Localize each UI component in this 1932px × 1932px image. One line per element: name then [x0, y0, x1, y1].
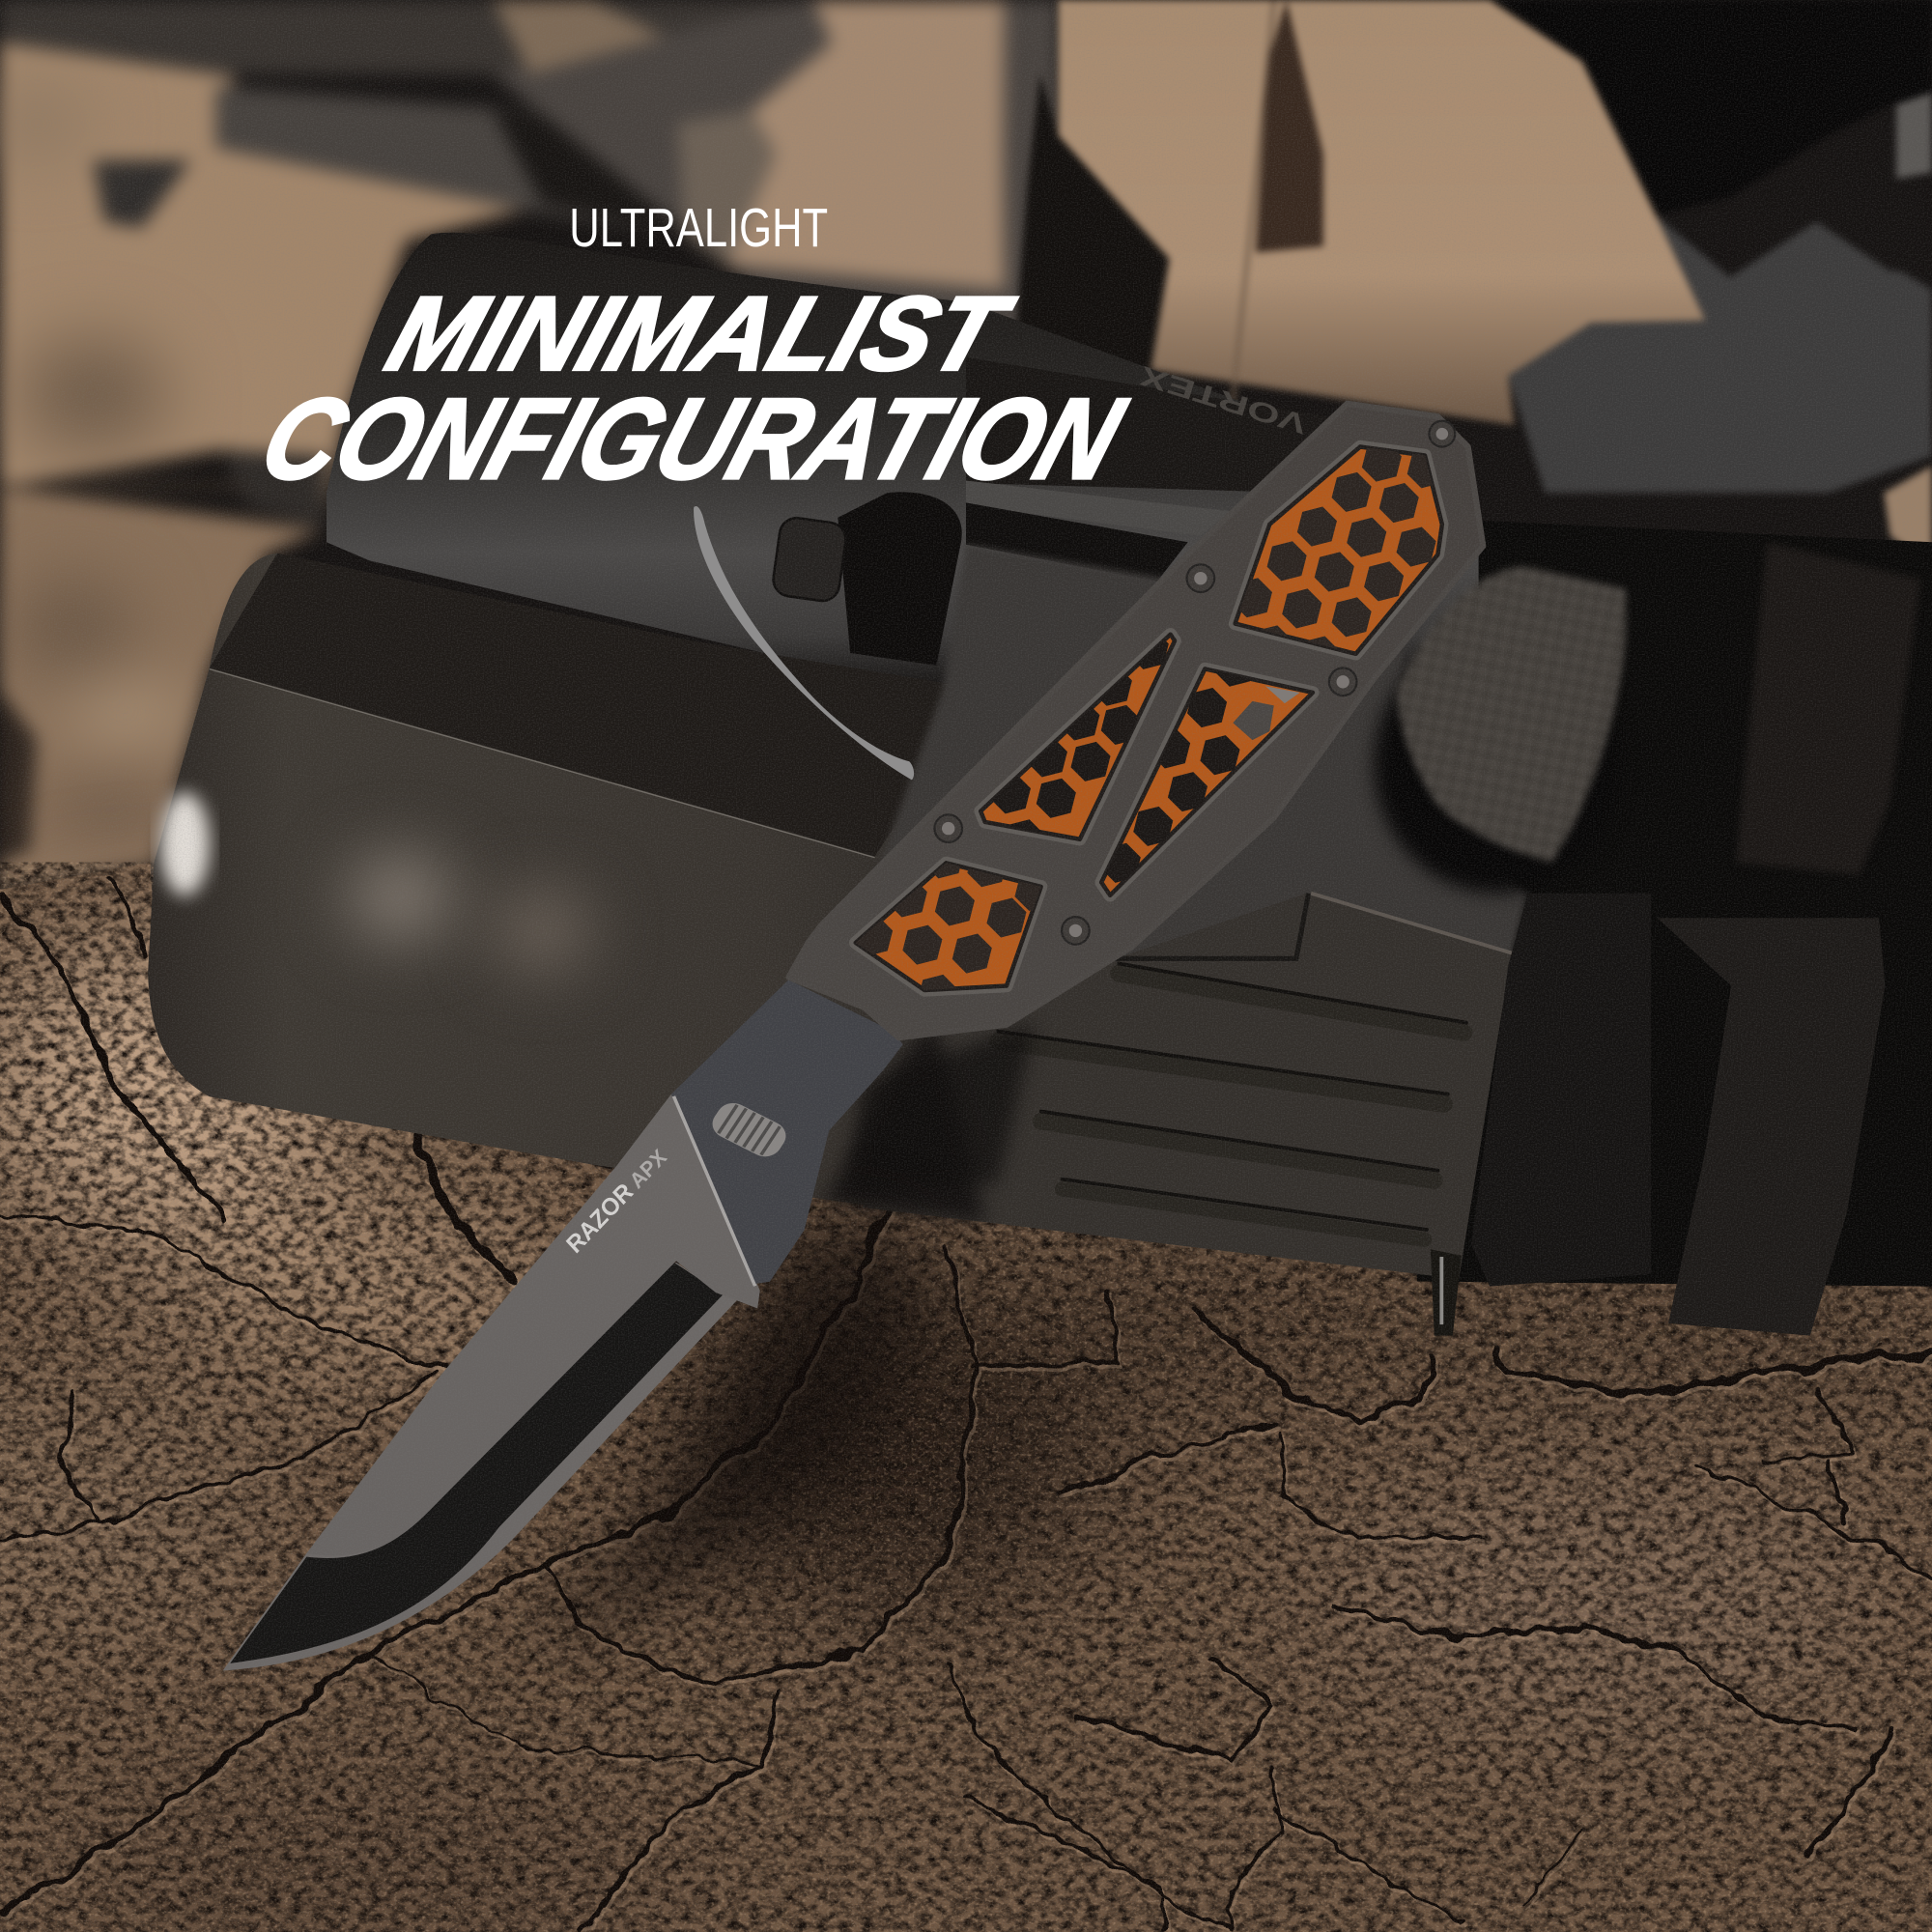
blade upper grey flat: [306, 1094, 760, 1555]
wood grain texture: [0, 863, 1932, 1932]
window: lower honeycomb: [849, 856, 1047, 997]
window: top honeycomb: [1233, 442, 1447, 676]
fabric right: [1015, 0, 1932, 912]
heading: MINIMALIST CONFIGURATION: [247, 274, 1138, 502]
knife: [223, 404, 1483, 1670]
eyepiece upper: [1736, 542, 1921, 875]
body ribs: [998, 963, 1466, 1239]
heading line 1: MINIMALIST: [375, 274, 1025, 392]
handle frame: [789, 404, 1483, 1037]
text: ULTRALIGHT: ULTRALIGHT: [569, 197, 828, 258]
window: centre-left honeycomb: [980, 630, 1175, 859]
brand mark: RAZOR APX: [559, 1144, 674, 1257]
handle scale and thumb stud: [671, 980, 903, 1286]
rivets: [934, 421, 1455, 945]
knife shadow on wood: [518, 1213, 936, 1651]
knurled focus ring: [1374, 567, 1627, 894]
heading line 2: CONFIGURATION: [247, 375, 1138, 502]
dark backdrop behind eyepieces: [1417, 518, 1932, 1287]
blade: [223, 1094, 760, 1670]
wood flecks: [0, 863, 1932, 1932]
binoculars: [148, 233, 1932, 1336]
window: centre-right honeycomb: [1101, 647, 1313, 895]
eyepiece lower: [1431, 894, 1886, 1336]
fabric shading left: [0, 93, 197, 844]
background: camouflage fabric: [0, 0, 1932, 912]
focus knob: [771, 492, 962, 666]
wood crack highlights: [3, 881, 1932, 1932]
arrow: callout stroke pointing to handle: [694, 506, 914, 780]
fabric left and top: [0, 0, 1060, 890]
logo emblem in window: [1233, 701, 1274, 740]
lower barrel body: [148, 554, 1516, 1279]
thumb stud: [706, 1097, 792, 1162]
background: cracked wood surface: [0, 863, 1932, 1932]
upper barrel: [327, 233, 1479, 690]
wood cracks: [0, 877, 1932, 1932]
blade black flat: [230, 1263, 723, 1663]
centre housing: [863, 545, 1528, 1023]
focus brand lettering: VORTEX: [1136, 360, 1310, 440]
blade edge bevel: [223, 1263, 740, 1670]
lower housing with ribs: [826, 894, 1518, 1279]
